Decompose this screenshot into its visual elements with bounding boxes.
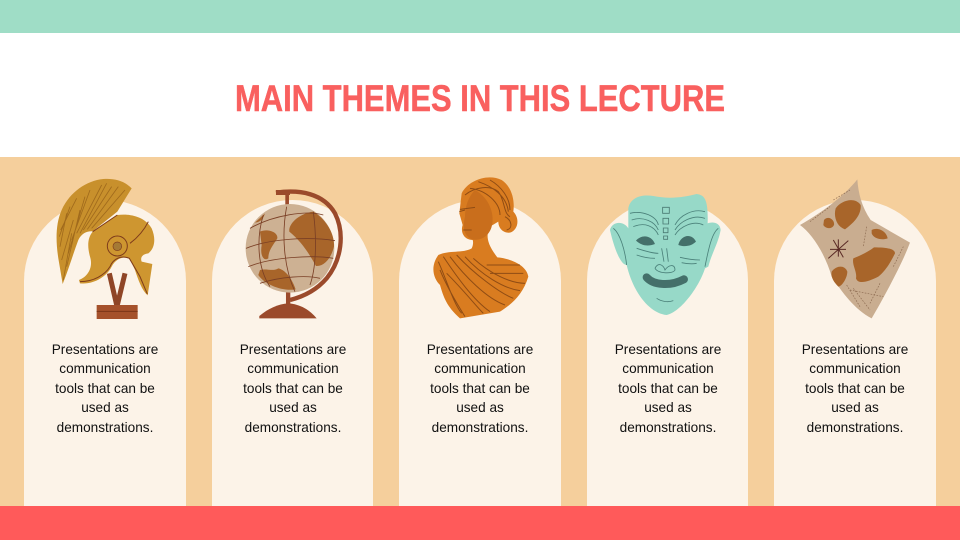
icon: helmet <box>57 179 154 319</box>
card 5 text: Presentations are <box>802 342 908 357</box>
card 1 text: used as <box>81 400 129 415</box>
card 3 arch <box>399 200 561 506</box>
card 4 text <box>615 342 721 435</box>
card 3 text: tools that can be <box>430 381 530 396</box>
card 2 arch <box>212 200 373 506</box>
title: MAIN THEMES IN THIS LECTURE <box>235 78 725 119</box>
top teal band <box>0 0 960 33</box>
card 1 text: Presentations are <box>52 342 158 357</box>
card 1 arch <box>24 200 186 506</box>
card 4 text: demonstrations. <box>620 420 716 435</box>
card 5 arch <box>774 200 936 506</box>
icon: globe <box>246 190 341 318</box>
card 2 text: tools that can be <box>243 381 343 396</box>
card 1 text: tools that can be <box>55 381 155 396</box>
card 2 text <box>240 342 346 435</box>
card 1 text: demonstrations. <box>57 420 153 435</box>
card 1 text <box>52 342 158 435</box>
card 5 text: used as <box>831 400 879 415</box>
icon: map <box>800 179 910 318</box>
card 3 text: Presentations are <box>427 342 533 357</box>
peach background panel <box>0 157 960 506</box>
card 4 text: Presentations are <box>615 342 721 357</box>
card 4 text: used as <box>644 400 692 415</box>
card 2 text: communication <box>247 361 339 376</box>
card 3 text <box>427 342 533 435</box>
card 2 text: Presentations are <box>240 342 346 357</box>
card 5 text <box>802 342 908 435</box>
icon: mask <box>610 194 721 315</box>
card 5 text: demonstrations. <box>807 420 903 435</box>
bottom red band <box>0 506 960 540</box>
card 4 arch <box>587 200 748 506</box>
card 3 text: communication <box>434 361 526 376</box>
card 5 text: tools that can be <box>805 381 905 396</box>
card 4 text: communication <box>622 361 714 376</box>
card 3 text: demonstrations. <box>432 420 528 435</box>
card 2 text: used as <box>269 400 317 415</box>
icon: bust <box>433 177 528 318</box>
card 4 text: tools that can be <box>618 381 718 396</box>
card 3 text: used as <box>456 400 504 415</box>
card 2 text: demonstrations. <box>245 420 341 435</box>
card 1 text: communication <box>59 361 151 376</box>
card 5 text: communication <box>809 361 901 376</box>
